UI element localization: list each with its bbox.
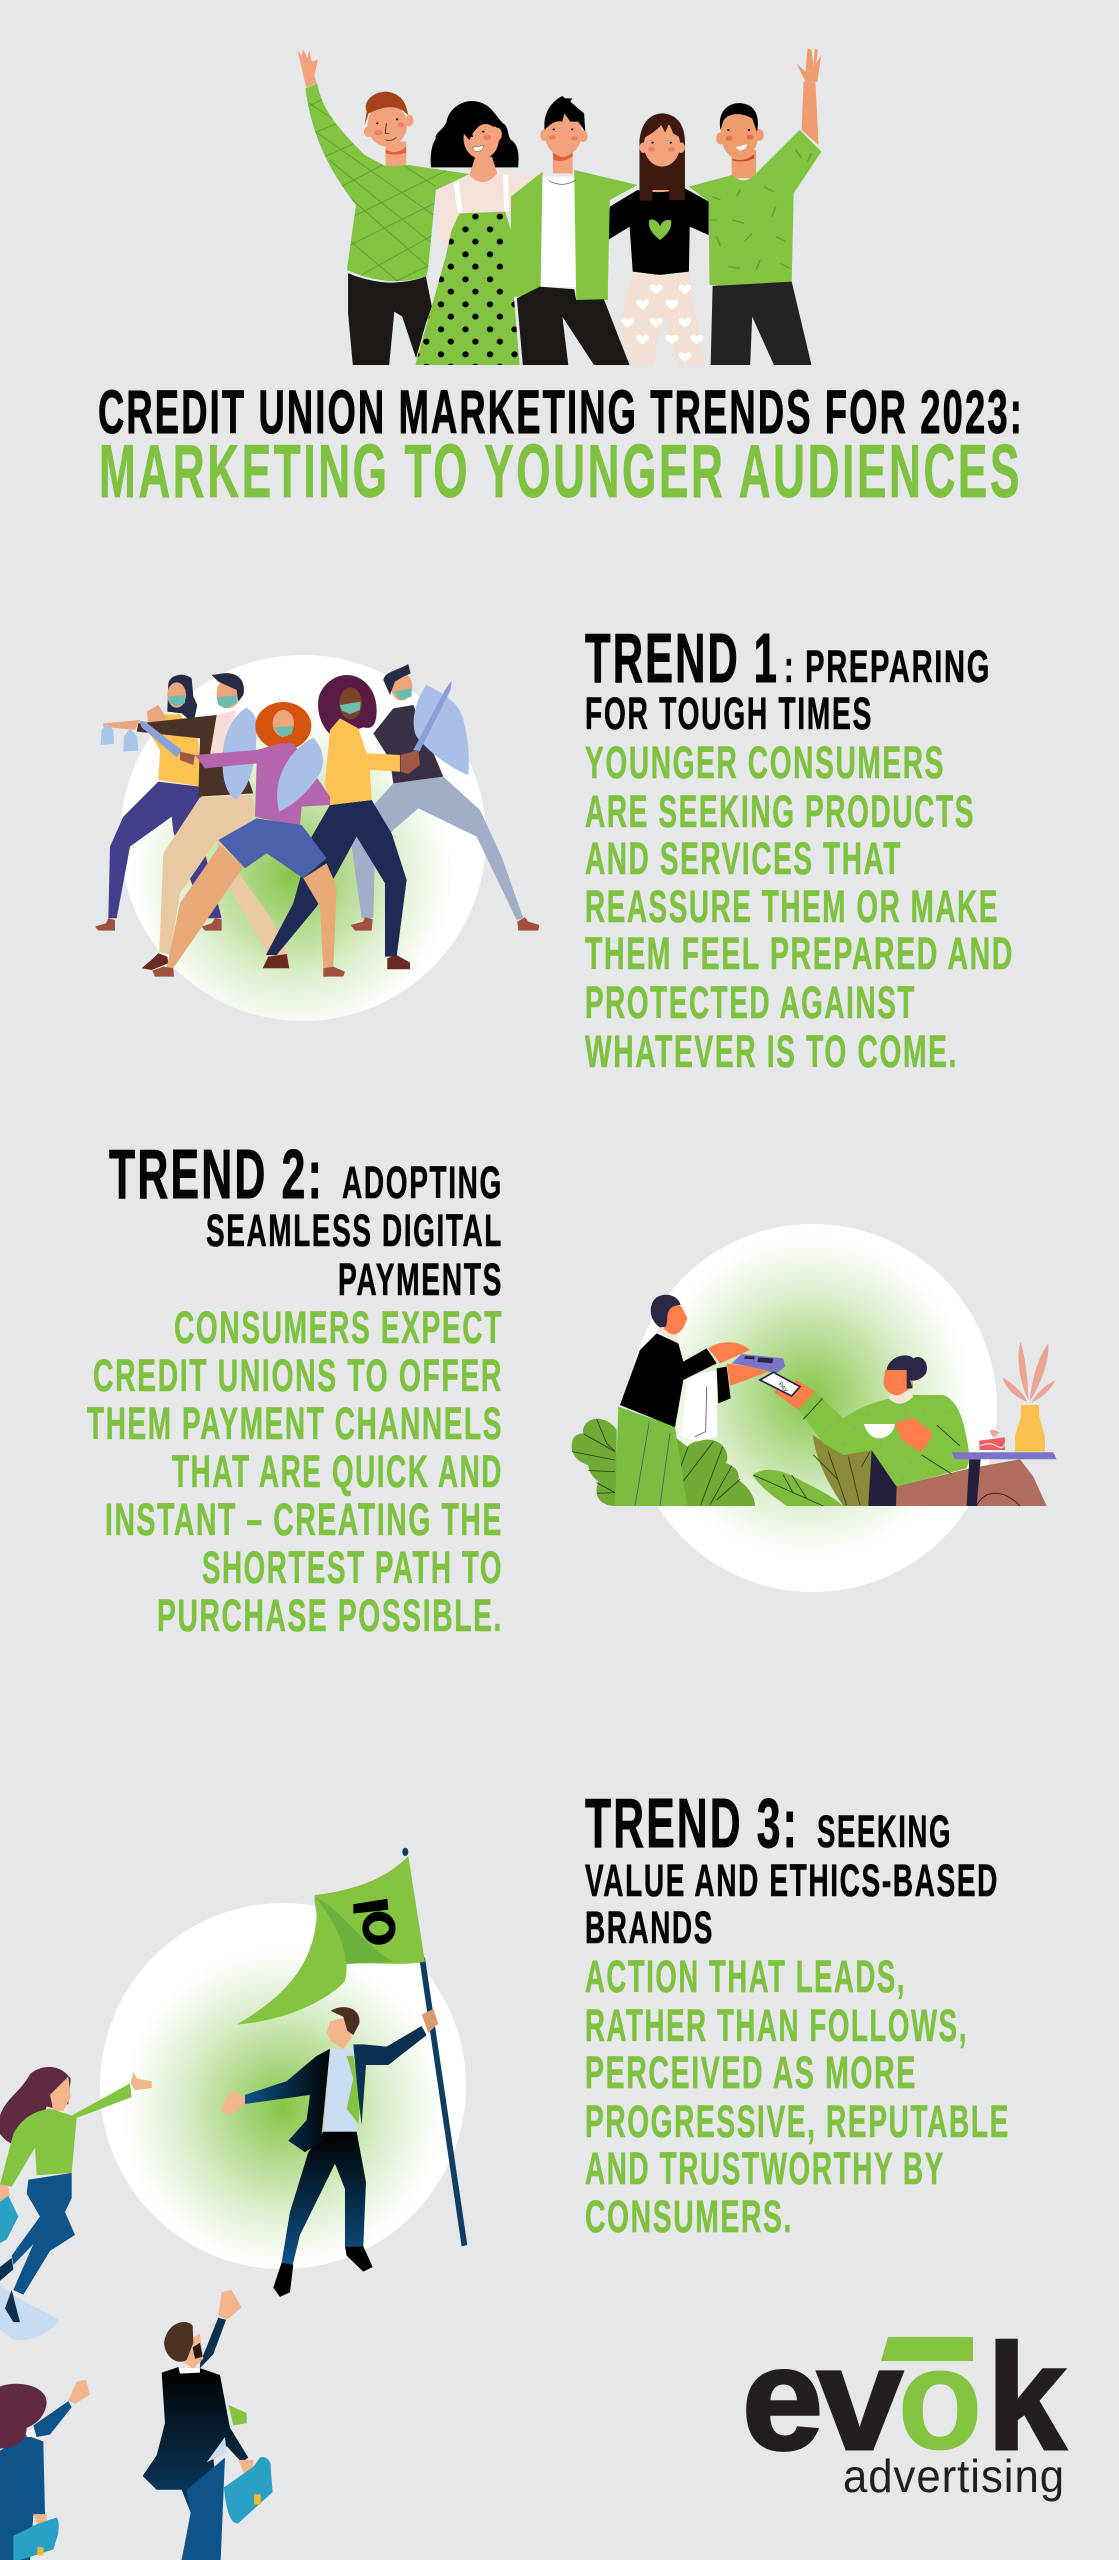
trend 1 heading: : PREPARING <box>784 641 991 692</box>
trend 2 description: THAT ARE QUICK AND <box>172 1446 503 1497</box>
front woman <box>255 702 311 750</box>
trend 3 heading: TREND 3: <box>585 1784 799 1862</box>
trend 3 description: CONSUMERS. <box>585 2191 793 2242</box>
trend 1 description: PROTECTED AGAINST <box>585 977 916 1028</box>
illustration: group of five young friends <box>297 48 821 365</box>
trend 1 heading: TREND 1 <box>585 619 779 697</box>
trend 1 description <box>585 737 1014 1077</box>
trend 2 heading: TREND 2: <box>109 1135 324 1213</box>
friend 4: woman with heart top <box>608 113 709 365</box>
trend 2 description: INSTANT – CREATING THE <box>105 1494 503 1545</box>
waiter and seated customer paying by phone <box>572 1295 1057 1506</box>
masked team with shields <box>95 664 539 977</box>
friend 1: man in plaid sweater <box>297 49 469 365</box>
trend 2 heading: ADOPTING <box>342 1157 503 1208</box>
woman hair <box>431 101 519 167</box>
logo: evok advertising <box>742 2313 1067 2502</box>
trend 3 heading <box>585 1784 999 1953</box>
back right man <box>352 777 523 920</box>
panel: trend 3 illustration <box>0 1848 467 2560</box>
follower man <box>200 2318 226 2368</box>
afro woman <box>318 675 377 737</box>
flag <box>237 1856 425 2025</box>
leader <box>282 2132 366 2265</box>
logo: evok advertising: e <box>742 2317 823 2480</box>
trend 2 description: CONSUMERS EXPECT <box>174 1302 503 1353</box>
glowing circle <box>629 1224 997 1592</box>
logo: evok advertising: advertising <box>843 2450 1065 2502</box>
trend 2 heading: SEAMLESS DIGITAL <box>206 1205 503 1256</box>
trend 1 heading: FOR TOUGH TIMES <box>585 688 873 739</box>
logo: evok advertising: o <box>897 2317 983 2480</box>
trend 2 description: SHORTEST PATH TO <box>202 1542 503 1593</box>
trend 2 description: THEM PAYMENT CHANNELS <box>87 1398 503 1449</box>
glowing circle <box>120 655 486 1021</box>
flag pole <box>419 1958 467 2246</box>
trend 2 heading: PAYMENTS <box>338 1254 503 1305</box>
text block: trend 3 <box>585 1784 1010 2242</box>
friend 3: man in green jacket <box>507 96 637 365</box>
logo: evok advertising: k <box>987 2313 1067 2481</box>
trend 2 description: PURCHASE POSSIBLE. <box>157 1590 503 1641</box>
trend 1 description: AND SERVICES THAT <box>585 833 902 884</box>
panel: trend 1 illustration <box>95 655 539 1021</box>
text block: trend 1 <box>585 619 1014 1077</box>
logo: evok advertising: v <box>817 2317 903 2480</box>
trend 3 description: PERCEIVED AS MORE <box>585 2047 917 2098</box>
trend 2 description <box>87 1302 503 1641</box>
glowing circle <box>100 1903 466 2269</box>
friend 5: man in speckled t-shirt <box>689 48 821 365</box>
waiter and seated customer paying by phone: PAY <box>777 1382 788 1394</box>
trend 3 description: ACTION THAT LEADS, <box>585 1951 906 2002</box>
trend 3 description <box>585 1951 1010 2242</box>
trend 3 heading: BRANDS <box>585 1902 714 1953</box>
text block: trend 2 <box>87 1135 503 1641</box>
trend 1 heading <box>585 619 991 739</box>
panel: trend 2 illustration <box>572 1224 1057 1592</box>
running woman <box>0 2285 60 2340</box>
title <box>98 378 1024 513</box>
follower woman <box>33 2401 72 2437</box>
trend 2 heading <box>109 1135 503 1305</box>
leader with flag and followers <box>0 1848 467 2560</box>
trend 2 description: CREDIT UNIONS TO OFFER <box>93 1350 503 1401</box>
friend 2: woman in polka dot dress <box>415 113 541 365</box>
trend 3 heading: SEEKING <box>817 1806 952 1857</box>
